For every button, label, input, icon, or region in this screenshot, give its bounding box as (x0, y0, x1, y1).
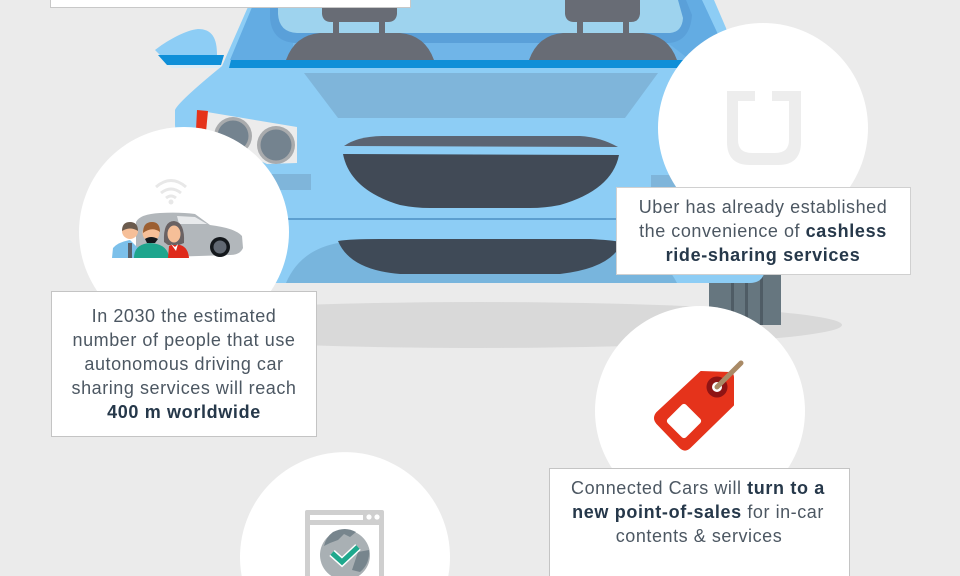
side mirror (155, 29, 224, 68)
car body (175, 0, 790, 283)
icon: browser window with globe (305, 510, 384, 576)
left vent (270, 174, 311, 190)
text box: autonomous car sharing: 400 m worldwide (107, 402, 261, 422)
text box: autonomous car sharing: number of people that use (73, 330, 295, 350)
text box: cashless ride-sharing: Uber has already established (639, 197, 887, 217)
bumper grille (338, 239, 622, 274)
headlight (196, 110, 297, 164)
text box: cashless ride-sharing: ride-sharing services (666, 245, 860, 265)
text box: autonomous car sharing: autonomous driving car (84, 354, 284, 374)
windshield (230, 0, 730, 60)
panel: uber (658, 23, 868, 233)
text box: new point of sales: new point-of-sales for in-car (572, 502, 824, 522)
icon: price tag (655, 363, 741, 450)
text box: autonomous car sharing (52, 292, 316, 436)
icon: uber U (727, 91, 801, 165)
trunk recess (304, 73, 658, 118)
text box: cashless ride-sharing (616, 188, 910, 274)
left seat (286, 0, 434, 60)
text box: autonomous car sharing: In 2030 the estimated (92, 306, 276, 326)
text box: top caption (50, 0, 410, 8)
car shadow (118, 302, 842, 348)
circle (240, 452, 450, 576)
illustration: car rear view (155, 0, 790, 325)
panel: car sharing (79, 127, 289, 337)
text box: new point of sales (550, 468, 850, 576)
text box: autonomous car sharing: sharing services will reach (72, 378, 296, 398)
body crease line (285, 218, 625, 220)
icon: wifi signal (156, 180, 186, 203)
icon: car with people (112, 213, 243, 258)
text box: new point of sales: Connected Cars will turn to a (571, 478, 825, 498)
circle (658, 23, 868, 233)
lower grille (343, 154, 619, 208)
upper grille (344, 136, 618, 147)
right vent (651, 175, 691, 189)
text box: new point of sales: contents & services (616, 526, 782, 546)
circle (595, 306, 805, 516)
right wheel (709, 270, 781, 325)
window trim strip (229, 60, 690, 68)
text box: cashless ride-sharing: the convenience of cashless (639, 221, 887, 241)
panel: web services (240, 452, 450, 576)
panel: point of sale (595, 306, 805, 516)
bumper arc (286, 243, 677, 283)
right seat (529, 0, 677, 60)
circle (79, 127, 289, 337)
